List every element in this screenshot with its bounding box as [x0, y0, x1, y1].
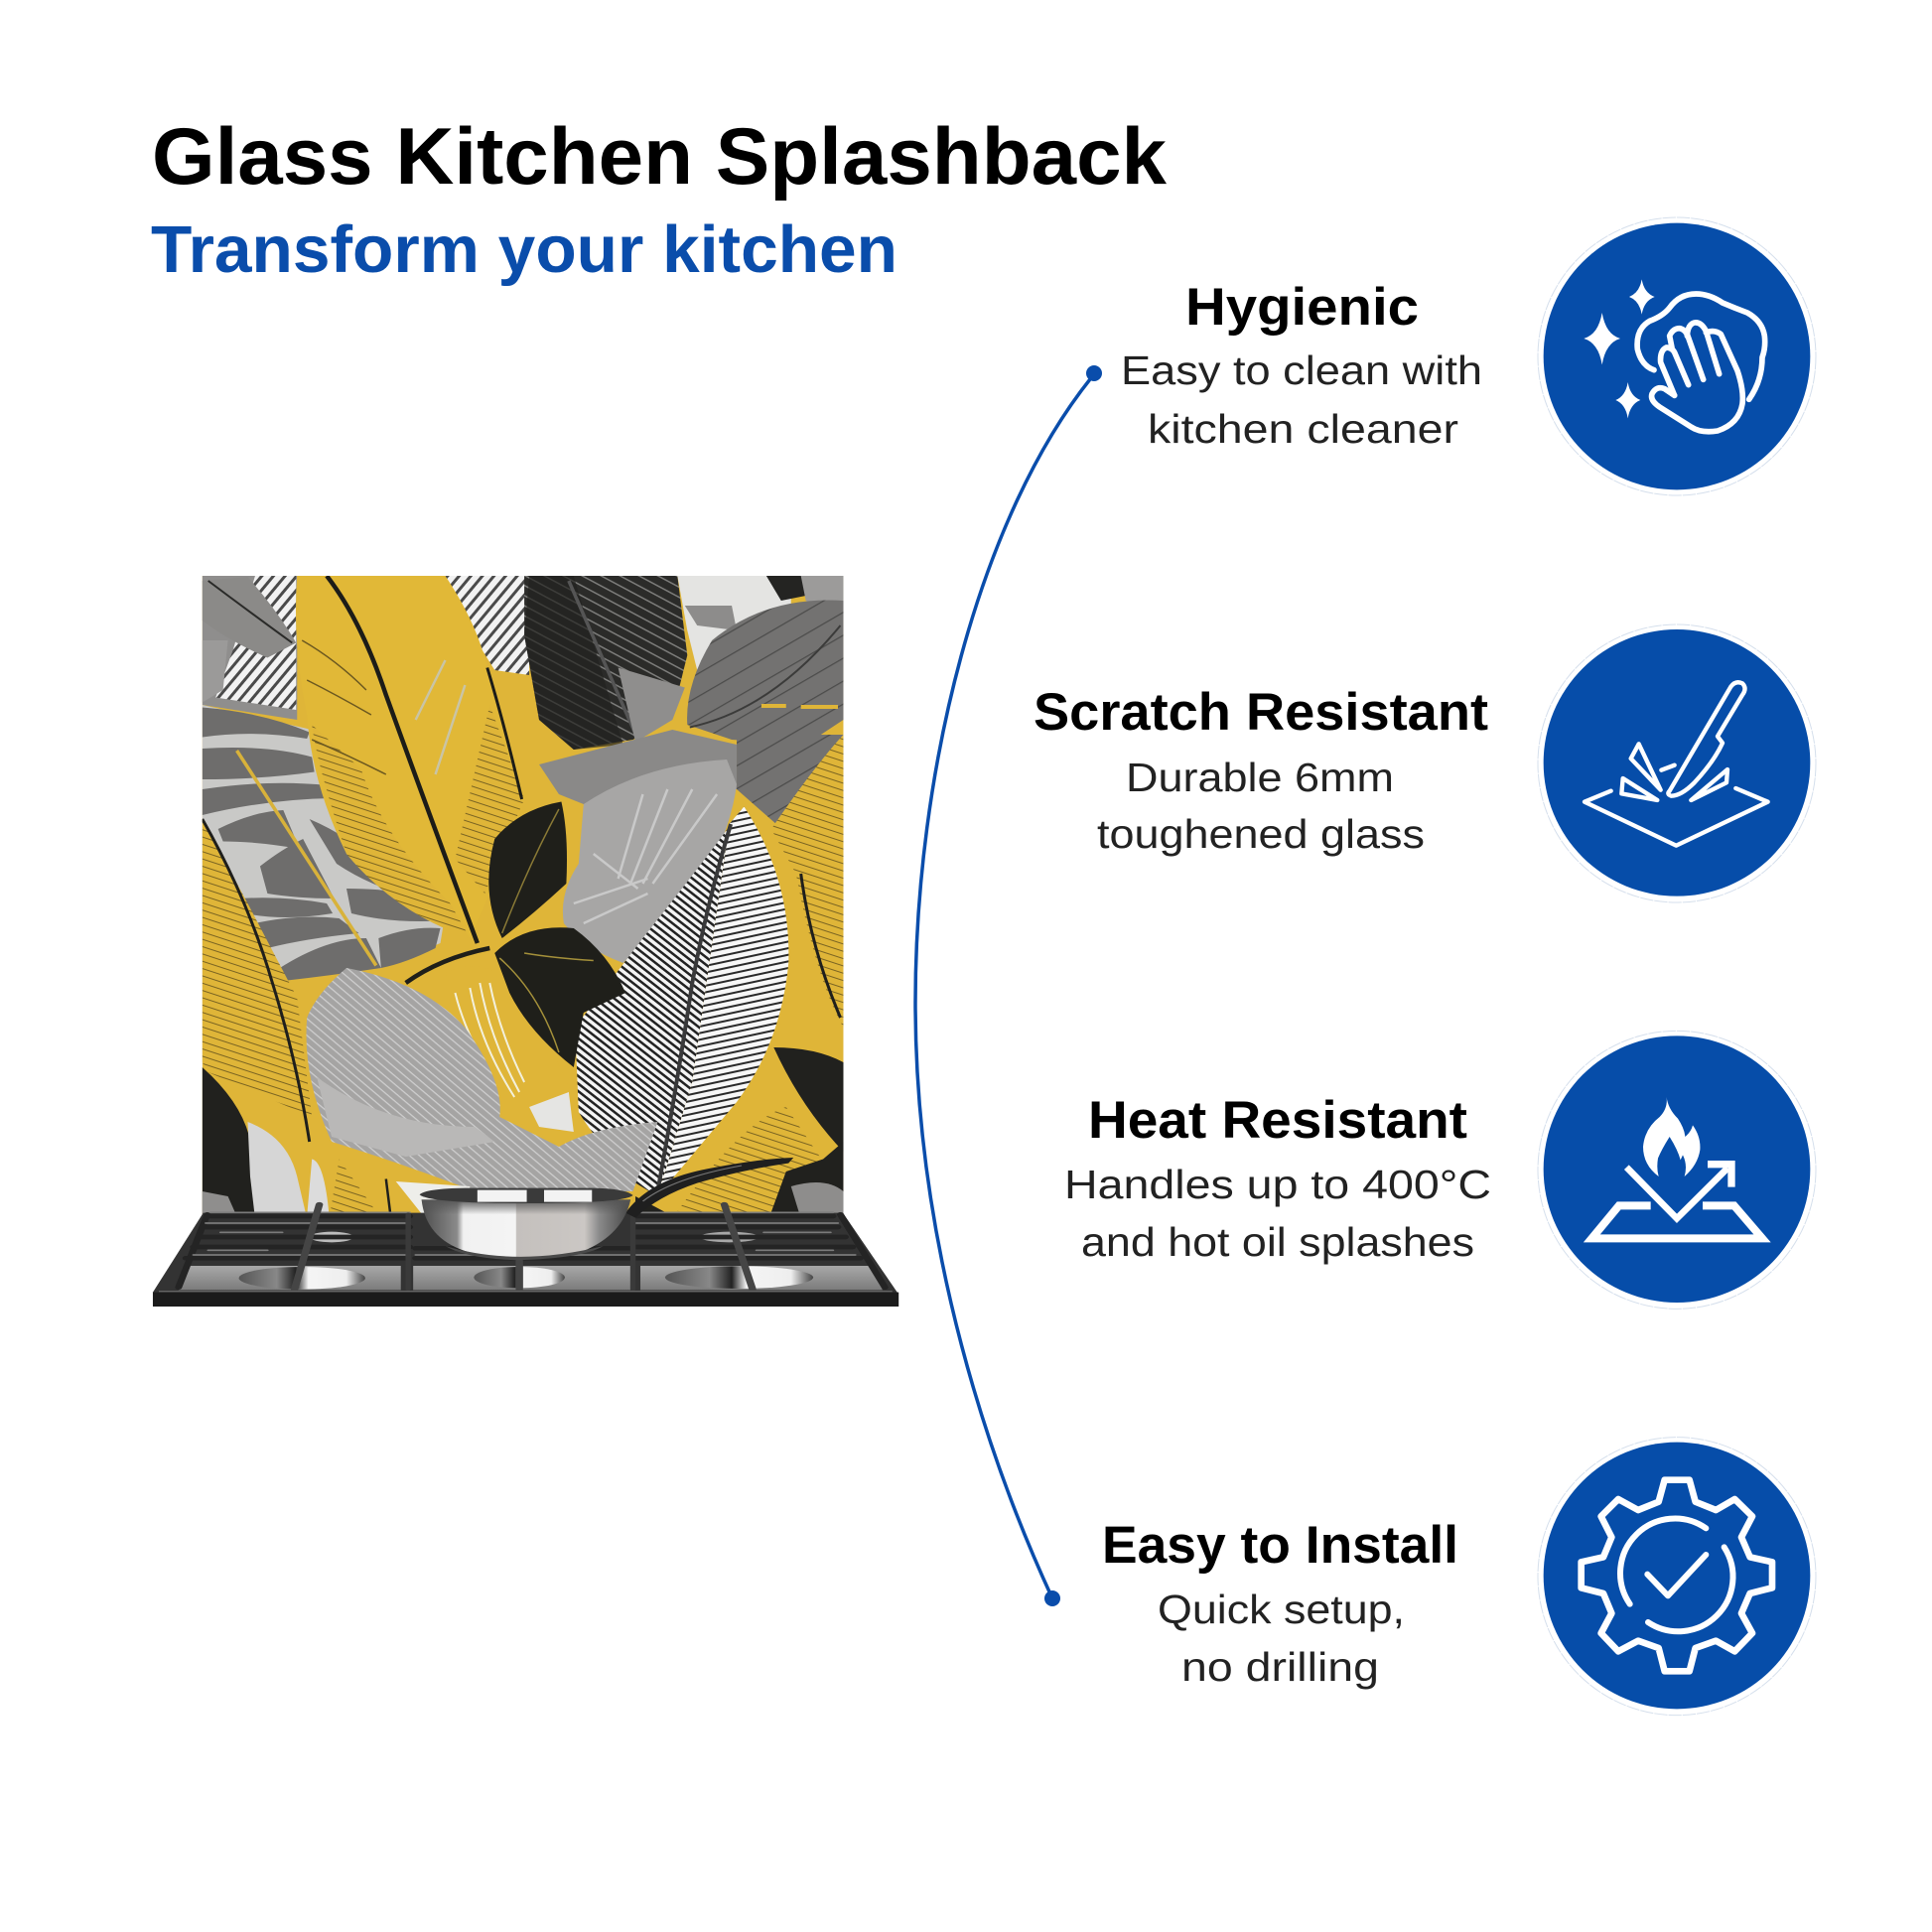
feature: Easy to Install	[1102, 1516, 1458, 1690]
icon: hand wiping with cloth and sparkles	[1538, 217, 1816, 495]
description: Handles up to 400°C	[1064, 1162, 1491, 1207]
feature: Hygienic	[1121, 278, 1482, 452]
description: Easy to clean with	[1121, 347, 1482, 393]
heading: Heat Resistant	[1088, 1091, 1467, 1150]
subtitle: Transform your kitchen	[151, 212, 897, 287]
heading: Hygienic	[1185, 278, 1419, 337]
product image: splashback panel with hob and pan	[153, 576, 898, 1307]
description	[1158, 1587, 1405, 1690]
description: and hot oil splashes	[1081, 1219, 1474, 1265]
connector curve with end dots	[915, 365, 1102, 1606]
heading: Easy to Install	[1102, 1516, 1458, 1575]
heading: Scratch Resistant	[1034, 683, 1488, 742]
icon: knife scratching glass	[1538, 624, 1816, 902]
description: kitchen cleaner	[1148, 406, 1458, 452]
description	[1064, 1162, 1491, 1265]
feature: Heat Resistant	[1064, 1091, 1491, 1265]
description	[1121, 347, 1482, 452]
description: Durable 6mm	[1126, 755, 1394, 800]
icon: flame above glass with rebound arrow	[1538, 1031, 1816, 1309]
gas hob	[153, 1204, 898, 1307]
feature: Scratch Resistant	[1034, 683, 1488, 857]
splashback panel: tropical leaf print	[203, 576, 843, 1219]
frying pan	[420, 1158, 793, 1260]
title: Glass Kitchen Splashback	[152, 112, 1168, 202]
description: no drilling	[1181, 1644, 1379, 1690]
description: Quick setup,	[1158, 1587, 1405, 1632]
icon: gear with check mark	[1538, 1438, 1816, 1716]
description: toughened glass	[1097, 811, 1425, 857]
description	[1097, 755, 1425, 857]
